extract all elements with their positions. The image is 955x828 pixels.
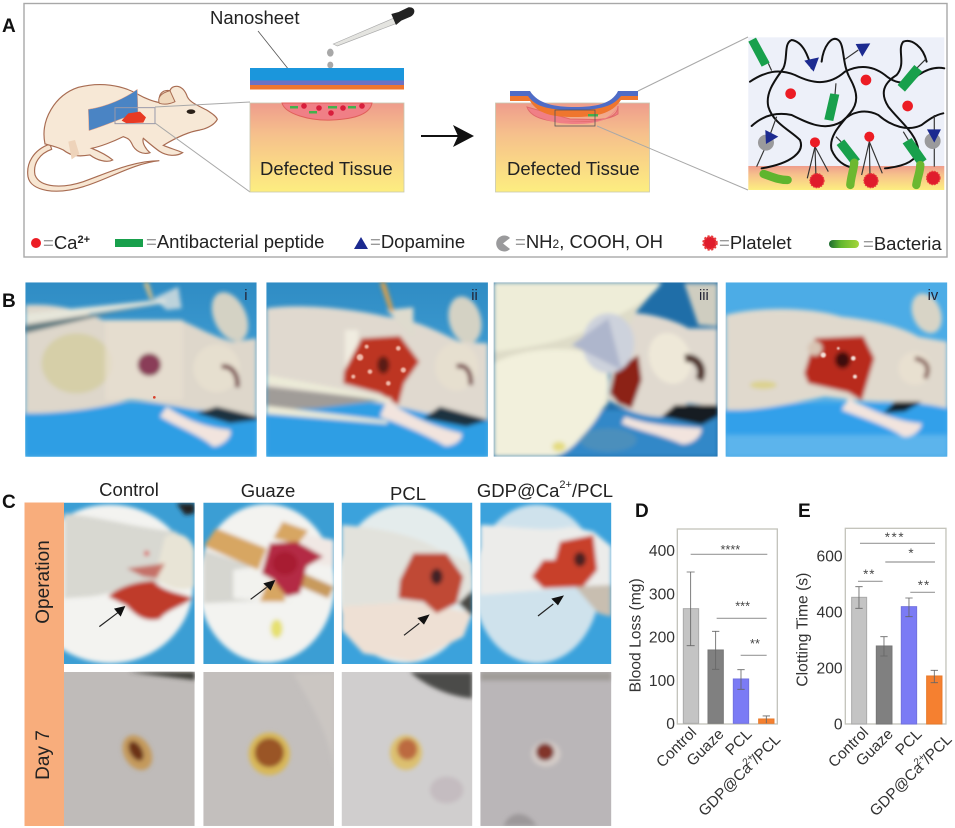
y axis: 400 [649,543,675,560]
label: Nanosheet: Nanosheet [210,7,299,28]
panel A: schematic frame [24,4,947,257]
photo i [25,282,257,457]
chart D: blood loss: Blood Loss (mg) [628,578,645,692]
y axis [649,543,675,733]
bacteria [764,163,920,185]
photo i: i [244,288,248,304]
platelets [810,171,940,188]
x labels [825,724,955,820]
column headings: Guaze [241,480,295,501]
x labels: PCL [892,725,926,759]
y axis: 200 [649,630,675,647]
legend: calcium [31,232,90,253]
column headings: Control [99,479,159,500]
chart E: clotting time: ** [863,567,875,582]
gray groups [758,133,941,151]
x labels: PCL [722,725,756,759]
panel label D: D [635,501,649,522]
defected tissue block: Defected Tissue [260,158,393,179]
significance brackets [858,543,935,592]
photo iii [494,282,718,457]
treated tissue block [496,91,650,192]
x labels: GDP@Ca [867,759,927,820]
polymer network curves [750,39,944,168]
x labels: 2+ [741,752,757,768]
red calcium dots [785,75,913,147]
panel C photos: PCL and GDP [337,503,611,826]
x labels: /PCL [748,731,784,767]
ligand lines [757,50,934,178]
nanosheet layers [250,68,404,90]
y axis: 0 [666,716,675,733]
panel B photos iii and iv [494,282,947,457]
icon: dropper [327,7,414,68]
treated tissue block: Defected Tissue [507,158,640,179]
label: Nanosheet [210,7,299,80]
photo control day 7 [64,672,195,826]
photo control operation [64,502,195,664]
row label strip [24,502,64,826]
tissue strip [748,166,944,190]
panel B photos i and ii [25,282,488,457]
photo ii [266,282,488,457]
chart E: clotting time: Clotting Time (s) [794,573,811,687]
panel label B: B [2,291,16,312]
y axis: 300 [649,586,675,603]
x labels: Control [825,724,872,771]
error bars [855,587,938,683]
y axis: 400 [817,605,843,622]
legend [31,231,942,254]
column headings: /PCL [572,480,613,501]
blue dopamine triangles [765,43,941,144]
chart D: blood loss: *** [735,600,750,614]
chart E: clotting time: ** [918,578,930,593]
chart E: clotting time: *** [885,529,905,544]
legend: platelet: =Platelet [719,232,792,253]
chart D: blood loss: **** [720,543,740,557]
photo PCL operation [337,503,473,664]
legend: bacteria [829,233,942,254]
chart D: blood loss: ** [750,637,760,651]
y axis: 600 [817,549,843,566]
column headings: 2+ [559,479,572,491]
significance brackets [691,554,767,655]
legend: antibacterial peptide: =Antibacterial peptide [146,231,324,252]
arrow [421,125,474,147]
chart E: clotting time: * [908,545,914,560]
y axis: 0 [834,717,843,734]
defected tissue block [250,103,404,192]
y axis: 200 [817,661,843,678]
legend: calcium: =Ca [43,232,77,253]
photo PCL day 7 [342,672,472,826]
legend: bacteria: =Bacteria [863,233,942,254]
legend: dopamine: =Dopamine [370,231,465,252]
x labels: 2+ [912,752,928,768]
chart E: clotting time [794,528,955,820]
photo GDP operation [473,503,611,664]
detail diagram: nanosheet network [748,37,944,190]
row label strip: Day 7 [33,730,54,780]
x labels: Guaze [684,726,727,770]
panel label A: A [2,16,16,37]
bars [683,609,774,723]
zoom guide lines to detail [597,37,748,190]
panel label E: E [798,501,811,522]
x labels [653,724,784,820]
x labels: Control [653,724,700,771]
panel label C: C [2,492,16,513]
photo ii: ii [471,288,478,304]
chart D: blood loss [628,529,784,820]
row label strip: Operation [33,540,54,624]
photo gauze operation [198,503,335,664]
photo gauze day 7 [203,672,334,826]
column headings: PCL [390,483,426,504]
photo iv [726,282,947,457]
y axis: 100 [649,673,675,690]
column headings: GDP@Ca [477,480,559,501]
x labels: /PCL [919,731,955,767]
icon: rat with patch [28,85,217,191]
x labels: GDP@Ca [695,759,756,820]
x labels: Guaze [853,726,897,770]
legend: functional groups: =NH2, COOH, OH [515,231,663,252]
column headings [99,479,613,504]
photo iv: iv [928,288,939,304]
panel C photos: control and gauze [27,503,335,826]
green peptides [748,38,927,165]
error bars [687,572,770,723]
photo GDP day 7 [480,672,611,826]
zoom guide lines to tissue [155,102,250,192]
photo iii: iii [699,288,709,304]
bars [852,597,942,724]
y axis [817,549,843,734]
legend: calcium: 2+ [77,234,90,246]
